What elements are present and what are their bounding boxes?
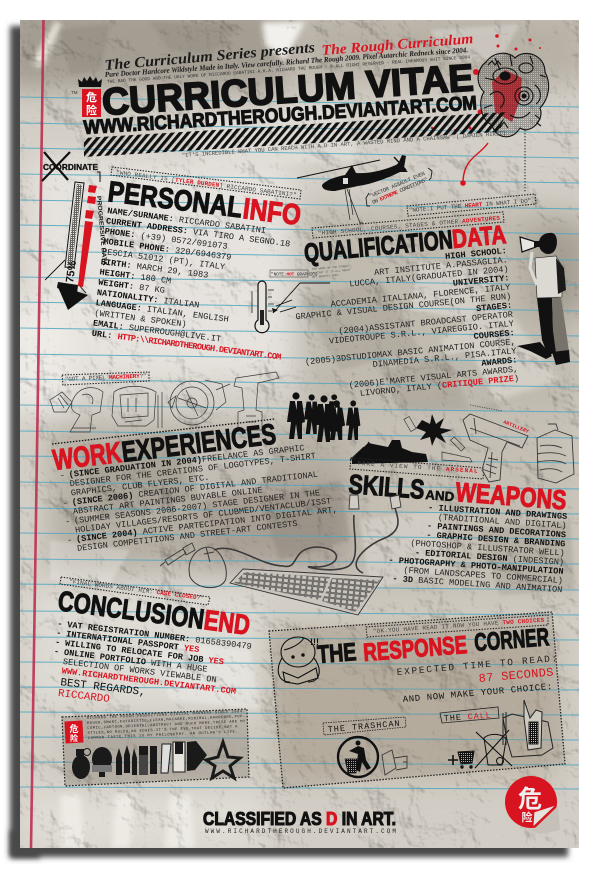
expected reading time: AND NOW MAKE YOUR CHOICE: (402, 682, 553, 705)
heading: work experiences: WORK (51, 437, 123, 477)
progress arrow: 75%: PROGRESSIVE DATA (95, 196, 107, 267)
conclusion text: WILLING TO RELOCATE FOR JOB YES (64, 639, 224, 667)
conclusion text: - (53, 647, 60, 657)
icon: red seal: 险 (70, 733, 78, 744)
panel: personal info (91, 167, 303, 363)
conclusion text: - (55, 637, 61, 648)
icons: ink splat, bullets and jeep (350, 414, 472, 464)
conclusion text: INTERNATIONAL PASSPORT YES (66, 629, 200, 655)
signature small print: COMIC,CARTOON,ORIENTAL,ABSTRACT AND MUCH MORE.THESE ARE MY (87, 720, 246, 731)
header script lines: THE BAD THE GOOD AND THE UGLY WORK OF RICCARDO SABATINI A.K.A. RICHARD THE ROUGH - © ALL RIGHT RESERVED - REAL INFAMOUS SHIT SINCE 2004 (107, 53, 471, 85)
dotted vertical (524, 130, 526, 192)
header script lines (104, 31, 474, 85)
personal details text (91, 206, 297, 363)
conclusion text: SELECTION OF WORKS VIEWABLE ON (62, 657, 217, 685)
note: adventures: "HIGH SCHOOL, COURSES, STAGES & OTHER ADVENTURES (318, 215, 501, 237)
signature small print (87, 710, 247, 741)
work experience text: DESIGN COMPETITIONS AND STREET-ART CONTESTS (77, 519, 298, 554)
label: the call (440, 707, 499, 724)
heading: conclusion end: END (202, 604, 252, 641)
personal details text: CURRENT ADDRESS: VIA TIRO A SEGNO.18 (105, 216, 291, 249)
quote: "IT'S INCREDIBLE WHAT YOU CAN REACH WITH A D IN ART, A WASTED MIND AND A CHAINSAW" ( DAMIEN HIRST) (182, 130, 506, 159)
skills text (387, 500, 567, 595)
heading: the response corner (316, 623, 550, 669)
work experience text: (SUMMER SEASONS 2006-2007) STAGE DESIGNER IN THE (73, 488, 321, 526)
qualification details text: AWARDS: (481, 355, 518, 369)
personal details text: EMAIL: SUPERROUGH@LIVE.IT (92, 318, 222, 345)
website url heading: WWW.RICHARDTHEROUGH.DEVIANTART.COM (83, 92, 478, 139)
note: machinery: "GOT A PIXEL MACHINERY?" (65, 372, 147, 383)
note: who really is: "WHO REALLY IS [TYLER DURDEN] RICCARDO SABATINI?" (116, 169, 297, 199)
heading: work experiences: EXPERIENCES (120, 419, 278, 469)
conclusion text: VAT REGISTRATION NUMBER: 01658390479 (67, 620, 252, 652)
expected reading time (396, 653, 558, 705)
icon: man with megaphone (517, 233, 570, 365)
skills text: - EDITORIAL DESIGN (INDESIGN) (415, 548, 564, 568)
heading: personal info: INFO (241, 193, 303, 232)
qualification details text: ACCADEMIA ITALIANA, FLORENCE, ITALY (330, 282, 511, 310)
qualification details text (291, 246, 520, 404)
conclusion text: BEST REGARDS, (60, 677, 146, 699)
title: curriculum vitae: CURRICULUM VITAE (101, 57, 475, 124)
heading: personal info: PERSONAL (106, 176, 244, 224)
icon: handgun (463, 414, 528, 482)
coordinate label (42, 152, 100, 182)
icon: hand with spray can (537, 424, 574, 483)
panel: conclusion (48, 577, 252, 722)
icon: usb stick (160, 543, 195, 566)
conclusion text: WWW.RICHARDTHEROUGH.DEVIANTART.COM (61, 666, 236, 697)
note: hot graphics: THE WORD ON THE STREET (312, 265, 349, 271)
icons: weapons and cosmetics row (72, 741, 240, 779)
work experience text (59, 440, 339, 555)
note: case closed: "FINAL WORDS ABOUT HIM: CASE CLOSED?" (69, 578, 205, 602)
work experience text: (SINCE 2004) ACTIVE PARTECIPATION INTO DIGITAL ART, (76, 505, 338, 545)
signature small print: COMMON TASTE.THIS IS MY PHILOSOPHY. AN OUTLAW'S LIFE. (88, 729, 238, 741)
work experience text: (SINCE GRADUATION IN 2004)FREELANCE AS GRAPHIC (68, 443, 305, 480)
personal details text: PESCIA 51012 (PT), ITALY (101, 247, 226, 272)
personal details text: LANGUAGE: ITALIAN, ENGLISH (95, 298, 229, 325)
personal details text: (WRITTEN & SPOKEN) (94, 308, 187, 330)
panel: skills and weapons (348, 469, 568, 595)
footer: classified as d in art: CLASSIFIED AS D IN ART. (203, 809, 396, 829)
expected reading time: EXPECTED TIME TO READ: (396, 653, 558, 678)
work experience text: ABSTRACT ART PAINTINGS BUYABLE ONLINE (72, 485, 263, 517)
icon: crossed-out shopping cart and vacuum (448, 730, 512, 768)
icon: trademark and red logo with crown (71, 76, 102, 118)
label: the call: THE CALL (444, 711, 491, 724)
qualification details text: UNIVERSITY: (452, 273, 510, 289)
icon: trademark and red logo with crown: 危 (86, 89, 97, 105)
work experience text: GRAPHICS, CLUB FLYERS, ETC. (70, 473, 210, 498)
personal details text: BIRTH: MARCH 29, 1983 (100, 257, 209, 281)
work experience text: (SINCE 2006) CREATION OF DIGITAL AND TRADITIONAL (71, 470, 318, 508)
red margin line (31, 20, 44, 848)
note: artillery (470, 405, 530, 435)
qualification details text: ART INSTITUTE A.PASSAGLIA. (374, 255, 508, 278)
qualification details text: DINAMEDIA S.R.L., PISA.ITALY (372, 346, 517, 370)
icon: red sticker seal: 危 (518, 779, 542, 814)
expected reading time: 87 SECONDS (478, 666, 554, 686)
qualification details text: HIGH SCHOOL: (445, 246, 507, 262)
icon: red seal: 危 (69, 722, 79, 735)
heading: qualification data: QUALIFICATION (303, 224, 454, 268)
personal details text: URL: (91, 329, 113, 341)
heading: the response corner: THE (316, 638, 357, 669)
skills text: - PHOTOGRAPHY & PHOTO-MANIPULATION (388, 555, 564, 577)
panel: signature box (62, 709, 249, 786)
note: two choices: "OK.YOU HAVE READ IT.NOW YOU HAVE TWO CHOICES (373, 617, 545, 635)
skills text: (FROM LANDSCAPES TO COMMERCIAL) (403, 565, 563, 586)
icon: helicopter (297, 155, 408, 223)
personal details text: HEIGHT: 180 CM (99, 267, 172, 286)
icon: trash bin sign (338, 737, 378, 777)
heading: work experiences (51, 419, 278, 477)
panel: work experiences (51, 419, 339, 555)
signature small print: STYLES,NO RULES,NO EDGES.IT'S THE EYE THAT DECIDE,NOT A (88, 724, 238, 736)
icon: trademark and red logo with crown: 险 (86, 102, 97, 118)
signature small print: ROUGH,SMART,FUTURISTIC,CLEAN,MACABRE,MINIMAL,HARDCORE,POP- (87, 715, 245, 726)
conclusion text: - (56, 628, 62, 639)
heading: conclusion end: CONCLUSION (56, 585, 206, 635)
skills text: (TRADITIONAL AND DIGITAL) (438, 513, 567, 531)
work experience text: - (62, 498, 69, 509)
conclusion text: ONLINE PORTFOLIO WITH A HUGE (63, 648, 208, 675)
heading: skills and weapons (348, 469, 568, 515)
notebook ruled lines (20, 97, 579, 789)
work experience text: HOLIDAY VILLAGES/RESORTS OF CLUBMED/VENTACLUB/ISST (75, 496, 332, 535)
note: vector assault (366, 168, 432, 206)
coordinate label: COORDINATE (43, 162, 98, 172)
heading: skills and weapons: WEAPONS (455, 477, 568, 515)
note: hot graphics (270, 265, 351, 279)
icon: monster splatter (431, 34, 549, 186)
icon: thermometer (252, 281, 330, 333)
progress arrow: 75% (45, 182, 107, 310)
personal details text: NATIONALITY: ITALIAN (96, 288, 200, 311)
icon: toilet rolls (382, 750, 407, 775)
heading: skills and weapons: SKILLS (348, 469, 426, 505)
icon: red sticker seal (505, 776, 560, 834)
label: the trashcan: THE TRASHCAN (327, 719, 400, 735)
skills text: (PHOTOSHOP & ILLUSTRATOR WELL) (410, 538, 565, 559)
icon: red sticker seal: 险 (522, 809, 532, 825)
icon: red seal (64, 721, 84, 744)
personal details text: NAME/SURNAME: RICCARDO SABATINI (107, 206, 266, 236)
footer: classified as d in art: WWW.RICHARDTHEROUGH.DEVIANTART.COM (205, 828, 396, 835)
icon: reservoir dogs silhouettes (287, 392, 360, 442)
panel: response corner (269, 612, 565, 788)
icon: keyboard (230, 569, 383, 615)
header script lines: Pure Doctor Hardcore Wildstyle Made in Italy. View carefully. Richard The Rough 2009. Pixel Autarchic Redneck since 2004. (105, 45, 468, 79)
note: hot graphics: "NOTE:HOT GRAPHICS (271, 272, 318, 277)
qualification details text: STAGES: (476, 301, 513, 314)
heading: qualification data: DATA (451, 219, 507, 254)
icons: usb cables (214, 495, 401, 573)
icon: computer mouse (189, 547, 226, 588)
qualification details text: (2005)3DSTUDIOMAX BASIC ANIMATION COURSE, (305, 337, 516, 367)
panel: qualification data (291, 219, 520, 404)
conclusion text: RICCARDO (57, 688, 110, 706)
skills text: - 3D BASIC MODELING AND ANIMATION (392, 574, 563, 595)
note: hot graphics: IS THAT IT IS ALL ABOUT (312, 269, 351, 275)
skills text: - ILLUSTRATION AND DRAWINGS (428, 503, 567, 522)
progress arrow: 75%: 75% (64, 260, 79, 283)
conclusion text: - (57, 619, 63, 629)
note: heart: "NOTE:I PUT THE HEART IN WHAT I DO" (409, 197, 532, 214)
header script lines: The Rough Curriculum (321, 31, 474, 59)
personal details text: MOBILE PHONE: 320/6946379 (103, 237, 232, 263)
heading: skills and weapons: AND (425, 487, 455, 504)
personal details text: WEIGHT: 87 KG (98, 278, 165, 296)
note: arsenal: TAKE A VIEW TO THE ARSENAL (357, 460, 478, 475)
qualification details text: LUCCA, ITALY(GRADUATED IN 2004) (349, 264, 509, 290)
conclusion text (48, 619, 252, 722)
icon: girl reading (278, 637, 319, 684)
note: vector assault: ON EXTREME CONDITIONS" (371, 177, 429, 206)
qualification details text: VIDEOTROUPE S.R.L., VIAREGGIO. ITALY (329, 319, 514, 347)
icon: girl reading: !!! (310, 637, 319, 647)
personal details text: HTTP:\\RICHARDTHEROUGH.DEVIANTART.COM (117, 332, 282, 363)
note: vector assault: "VECTOR ASSAULT EVEN (368, 171, 426, 200)
header script lines: The Curriculum Series presents (104, 40, 316, 74)
icon: telephone (503, 700, 553, 757)
qualification details text: COURSES: (473, 328, 515, 342)
icons: power tools line art (50, 372, 279, 432)
signature small print: RICHARD THE ROUGH PRODUCTIONS.DIGITAL MADNESS SINCE 2004. (87, 710, 245, 721)
qualification details text: (2006)E'MARTE VISUAL ARTS AWARDS, (348, 364, 519, 391)
skills text: - PAINTINGS AND DECORATIONS (427, 521, 566, 540)
note: hot graphics: HOT GRAPHIC FUEL (312, 274, 339, 279)
hatched stripe band (84, 112, 507, 157)
work experience text: - (59, 470, 66, 481)
icon: trademark and red logo with crown: TM (71, 90, 78, 95)
work experience text: - (65, 517, 71, 527)
qualification details text: LIVORNO, ITALY (CRITIQUE PRIZE) (359, 374, 520, 399)
heading: the response corner: CORNER (473, 623, 550, 657)
note: arsenal (350, 458, 484, 479)
work experience text: - (67, 535, 73, 546)
work experience text: DESIGNER FOR THE CREATIONS OF LOGOTYPES, T-SHIRT (69, 451, 316, 489)
qualification details text: (2004)ASSISTANT BROADCAST OPERATOR (338, 310, 513, 337)
note: artillery: ARTILLERY (502, 419, 530, 435)
heading: the response corner: RESPONSE (362, 631, 468, 667)
personal details text: PHONE: (+39) 0572/091073 (104, 226, 228, 252)
skills text: - GRAPHIC DESIGN & BRANDING (426, 530, 566, 549)
qualification details text: GRAPHIC & VISUAL DESIGN COURSE(ON THE RUN) (295, 292, 512, 322)
